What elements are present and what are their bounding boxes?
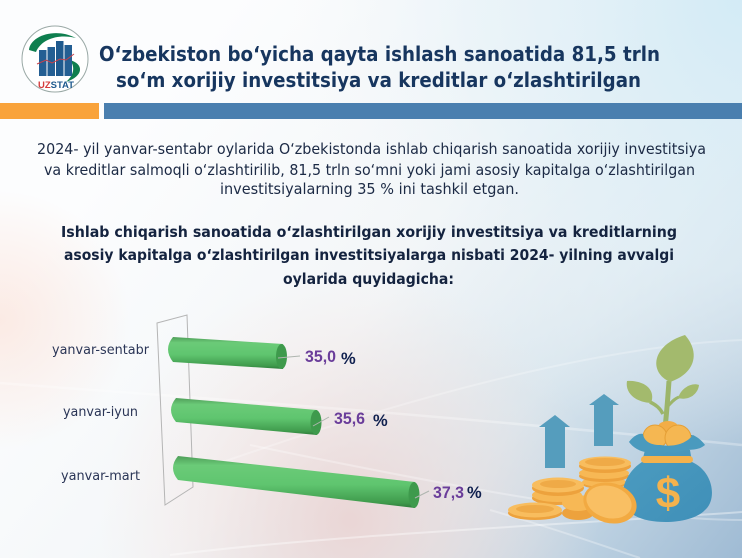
title bbox=[99, 42, 660, 92]
intro text: investitsiyalarning 35 % ini tashkil etgan. bbox=[220, 180, 519, 198]
logo: UZSTAT: UZSTAT bbox=[38, 80, 75, 90]
icon: up arrows bbox=[539, 394, 619, 468]
value labels: 37,3 bbox=[433, 484, 464, 502]
value labels: % bbox=[467, 484, 482, 502]
bar: yanvar-sentabr bbox=[168, 337, 300, 369]
category labels: yanvar-iyun bbox=[63, 404, 138, 420]
intro text bbox=[37, 140, 706, 198]
bar: yanvar-iyun bbox=[171, 398, 329, 435]
icon: money bag: $ bbox=[656, 469, 680, 518]
icon: large coin bbox=[579, 477, 641, 529]
category labels bbox=[52, 342, 149, 484]
category labels: yanvar-mart bbox=[61, 468, 140, 484]
header bars bbox=[0, 103, 742, 119]
icon: right coin stack bbox=[579, 456, 631, 489]
value labels: % bbox=[341, 350, 356, 368]
intro text: va kreditlar salmoqli o‘zlashtirilib, 81,5 trln so‘mni yoki jami asosiy kapitalga o‘zlashtirilgan bbox=[44, 161, 695, 179]
value labels: 35,0 bbox=[305, 348, 336, 366]
chart heading: asosiy kapitalga o‘zlashtirilgan investitsiyalarga nisbati 2024- yilning avvalgi bbox=[64, 246, 674, 264]
illustration: money bag, coins, arrows bbox=[508, 335, 712, 529]
bar: yanvar-mart bbox=[173, 456, 429, 508]
value labels bbox=[305, 348, 482, 502]
chart heading bbox=[61, 223, 677, 288]
title: so‘m xorijiy investitsiya va kreditlar o‘zlashtirilgan bbox=[116, 68, 641, 92]
chart heading: Ishlab chiqarish sanoatida o‘zlashtirilgan xorijiy investitsiya va kreditlarning bbox=[61, 223, 677, 241]
category labels: yanvar-sentabr bbox=[52, 342, 149, 358]
chart heading: oylarida quyidagicha: bbox=[283, 270, 454, 288]
title: O‘zbekiston bo‘yicha qayta ishlash sanoatida 81,5 trln bbox=[99, 42, 660, 66]
value labels: 35,6 bbox=[334, 410, 365, 428]
logo: UZSTAT bbox=[22, 26, 88, 92]
bar chart bbox=[52, 315, 482, 508]
icon: left coin stack bbox=[508, 478, 594, 520]
icon: money bag bbox=[623, 421, 712, 522]
icon: sprout bbox=[627, 335, 699, 428]
intro text: 2024- yil yanvar-sentabr oylarida O‘zbekistonda ishlab chiqarish sanoatida xorijiy investitsiya bbox=[37, 140, 706, 158]
value labels: % bbox=[373, 412, 388, 430]
